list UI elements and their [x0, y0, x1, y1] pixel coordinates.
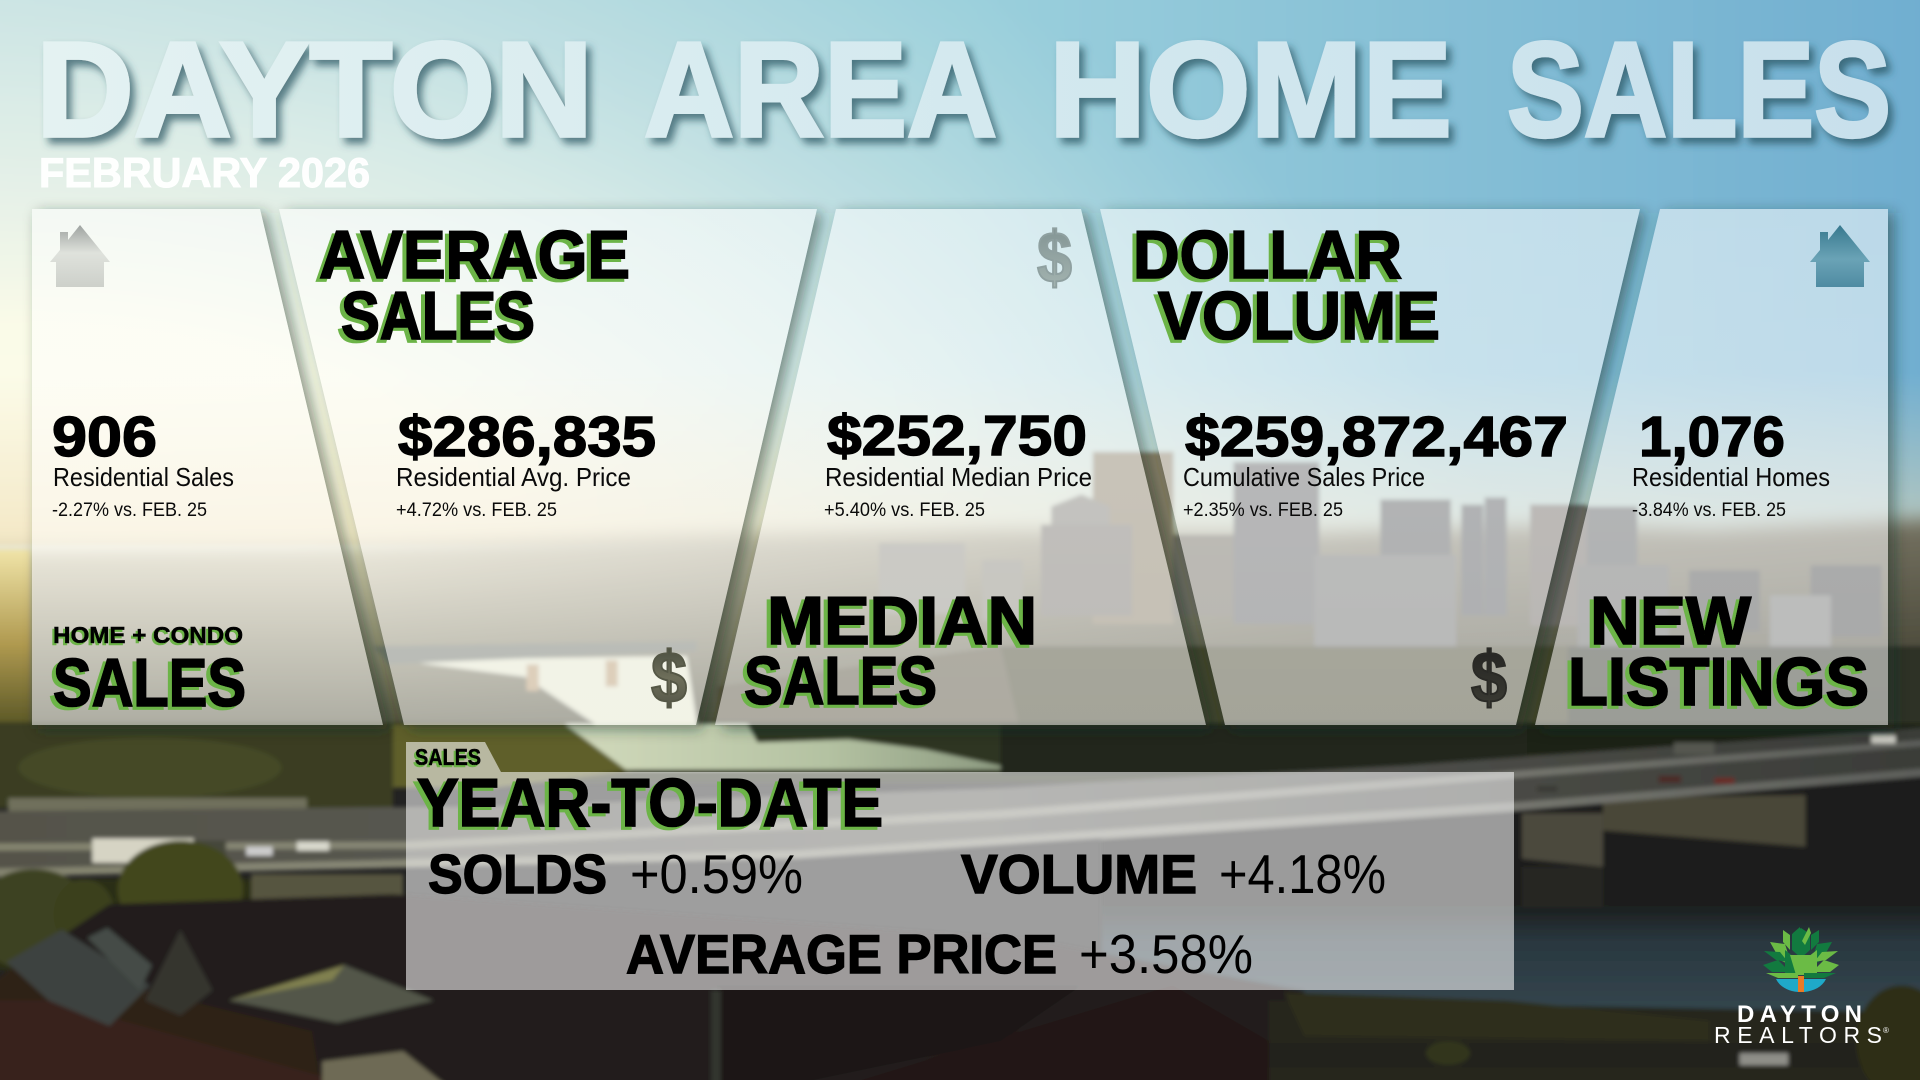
panel: dollar volume [1100, 209, 1640, 725]
metric: residential homes: 1,076 [1639, 405, 1785, 469]
water and bridge piers [1102, 732, 1920, 1013]
metric: residential homes: -3.84% vs. FEB. 25 [1632, 500, 1786, 521]
heading: average sales: AVERAGE [319, 217, 630, 293]
panel: year-to-date [406, 742, 1514, 990]
heading: year-to-date: YEAR-TO-DATE [417, 765, 883, 841]
logo text: Realtors: REALTORS [1714, 1022, 1882, 1048]
buildings and roofs in foreground [0, 894, 1304, 1080]
stat: solds: +0.59% [630, 843, 803, 905]
metric: residential homes: Residential Homes [1632, 462, 1830, 492]
metric: average price: $286,835 [398, 405, 656, 469]
metric: cumulative sales price: +2.35% vs. FEB. 25 [1183, 500, 1343, 521]
icon: dollar sign: $ [651, 638, 687, 718]
stat: solds [428, 843, 803, 905]
registered mark: ® [1883, 1026, 1889, 1035]
heading: home + condo sales: HOME + CONDO [53, 622, 243, 648]
distant hazy land [0, 517, 1920, 758]
icon: dollar sign: $ [1037, 218, 1072, 298]
heading: median sales [744, 583, 1037, 719]
panel: average sales [279, 209, 817, 725]
heading: new listings [1568, 583, 1869, 720]
metric: residential sales: 906 [52, 405, 157, 469]
heading: dollar volume: VOLUME [1158, 278, 1440, 354]
metric: average price [396, 405, 656, 521]
heading: median sales: SALES [744, 643, 937, 719]
stat: average price: AVERAGE PRICE [626, 923, 1057, 985]
logo: Dayton Realtors [1714, 927, 1889, 1048]
title: Dayton Area Home Sales: DAYTON [36, 14, 593, 165]
metric: cumulative sales price: Cumulative Sales Price [1183, 462, 1425, 492]
metric: average price: +4.72% vs. FEB. 25 [396, 500, 557, 521]
panel: new listings [1535, 209, 1888, 725]
heading: new listings: NEW [1590, 583, 1752, 659]
left trees below highway [0, 841, 403, 970]
heading: average sales [319, 217, 630, 354]
icon: house [1810, 225, 1870, 287]
stat: solds: SOLDS [428, 843, 607, 905]
metric: residential sales: Residential Sales [53, 462, 234, 492]
icon: house [50, 225, 110, 287]
heading: home + condo sales: SALES [53, 645, 246, 721]
riverside ground [1269, 985, 1920, 1080]
stat: volume: +4.18% [1219, 843, 1386, 905]
stat: volume [961, 843, 1386, 905]
heading: dollar volume [1133, 217, 1440, 354]
metric: median price [824, 404, 1092, 521]
subtitle: date: FEBRUARY 2026 [39, 149, 370, 196]
skyline buildings [879, 452, 1881, 666]
metric: residential sales: -2.27% vs. FEB. 25 [52, 500, 207, 521]
stat: average price: +3.58% [1079, 923, 1253, 985]
logo text: Dayton: DAYTON [1737, 1001, 1862, 1028]
heading: average sales: SALES [341, 278, 535, 354]
metric: average price: Residential Avg. Price [396, 462, 631, 492]
highway [0, 727, 1920, 877]
panel shadows between cards [38, 213, 1894, 729]
tab label: sales: SALES [415, 744, 481, 770]
icon: dollar sign: $ [1471, 638, 1507, 718]
metric: median price: +5.40% vs. FEB. 25 [824, 500, 985, 521]
panel: median sales [715, 209, 1206, 725]
title: Dayton Area Home Sales [36, 14, 1891, 165]
icon: tree [1763, 927, 1839, 992]
title: Dayton Area Home Sales: HOME [1049, 14, 1452, 165]
metric: median price: Residential Median Price [825, 462, 1092, 492]
river [373, 641, 1001, 770]
heading: dollar volume: DOLLAR [1133, 217, 1402, 293]
metric: residential homes [1632, 405, 1830, 521]
metric: residential sales [52, 405, 234, 521]
metric: cumulative sales price [1183, 405, 1568, 521]
metric: cumulative sales price: $259,872,467 [1185, 405, 1568, 469]
heading: median sales: MEDIAN [767, 583, 1037, 659]
heading: new listings: LISTINGS [1568, 644, 1869, 720]
foreground left trees and barrier [0, 722, 393, 820]
title: Dayton Area Home Sales: AREA [644, 14, 997, 165]
tree line and mid ground [0, 646, 1920, 788]
panel: home and condo sales [32, 209, 383, 725]
heading: home + condo sales [53, 622, 246, 721]
stat: volume: VOLUME [961, 843, 1197, 905]
sunlit left edge [0, 550, 31, 737]
metric: median price: $252,750 [827, 404, 1087, 468]
